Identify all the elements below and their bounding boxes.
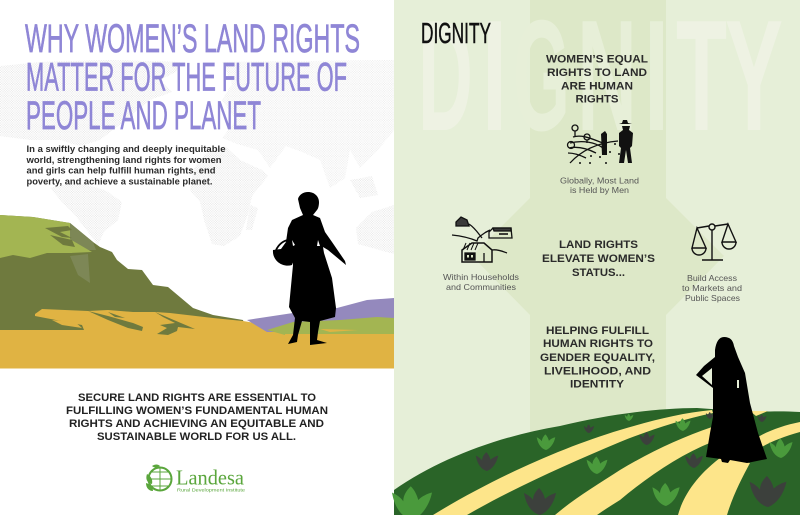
- panel: dignity: [392, 0, 800, 515]
- title: [25, 17, 360, 138]
- caption: most land held by men: Globally, Most Land: [560, 176, 639, 186]
- logo: Landesa: [146, 464, 245, 494]
- caption: build access: [682, 273, 742, 303]
- text: equal rights: WOMEN’S EQUAL: [546, 54, 648, 66]
- caption: households: Within Households: [443, 272, 519, 282]
- text: land rights elevate status: ELEVATE WOMEN’S: [542, 253, 655, 265]
- icon: houses: [452, 217, 512, 262]
- logo: Landesa: Landesa: [176, 466, 245, 490]
- silhouette: woman in long dress: [696, 337, 767, 463]
- world map background: [0, 60, 394, 254]
- text: helping fulfill human rights: IDENTITY: [570, 378, 625, 390]
- intro paragraph: In a swiftly changing and deeply inequitable: [26, 144, 226, 154]
- text: helping fulfill human rights: LIVELIHOOD, AND: [544, 366, 651, 378]
- closing statement: SECURE LAND RIGHTS ARE ESSENTIAL TO: [78, 392, 316, 404]
- caption: most land held by men: is Held by Men: [570, 185, 629, 195]
- closing statement: FULFILLING WOMEN’S FUNDAMENTAL HUMAN: [66, 405, 328, 417]
- plants: dark: [476, 412, 786, 515]
- heading: dignity: DIGNITY: [421, 18, 491, 50]
- panel: left: [0, 0, 394, 515]
- field with rows: [392, 408, 800, 515]
- caption: build access: to Markets and: [682, 283, 742, 293]
- title: MATTER FOR THE FUTURE OF: [26, 56, 347, 100]
- text: helping fulfill human rights: HELPING FULFILL: [546, 325, 649, 337]
- intro paragraph: [25, 144, 226, 186]
- caption: households: [443, 272, 519, 292]
- caption: build access: Public Spaces: [685, 293, 740, 303]
- closing statement: [66, 392, 328, 443]
- landscape illustration: [0, 215, 394, 368]
- central cross shape: [472, 0, 724, 515]
- text: equal rights: RIGHTS TO LAND: [547, 67, 647, 79]
- text: helping fulfill human rights: HUMAN RIGHTS TO: [543, 338, 653, 350]
- icon: scales: [692, 224, 736, 260]
- intro paragraph: poverty, and achieve a sustainable planet.: [26, 176, 212, 186]
- icon: farmland with man and woman: [568, 120, 633, 164]
- title: WHY WOMEN’S LAND RIGHTS: [25, 17, 360, 61]
- title: PEOPLE AND PLANET: [26, 94, 261, 138]
- closing statement: RIGHTS AND ACHIEVING AN EQUITABLE AND: [69, 418, 324, 430]
- caption: build access: Build Access: [687, 273, 737, 283]
- watermark word: [418, 0, 783, 164]
- text: equal rights: ARE HUMAN: [561, 80, 633, 92]
- text: helping fulfill human rights: [540, 325, 655, 390]
- text: land rights elevate status: [542, 239, 655, 279]
- caption: most land held by men: [560, 176, 639, 195]
- intro paragraph: world, strengthening land rights for women: [25, 155, 221, 165]
- text: equal rights: RIGHTS: [576, 94, 618, 106]
- text: helping fulfill human rights: GENDER EQUALITY,: [540, 352, 655, 364]
- plants: green: [392, 414, 793, 515]
- logo: Landesa: Rural Development Institute: [177, 488, 245, 494]
- intro paragraph: and girls can help fulfill human rights, end: [26, 166, 216, 176]
- caption: households: and Communities: [446, 282, 516, 292]
- text: land rights elevate status: LAND RIGHTS: [559, 239, 638, 251]
- silhouette: woman with basket: [273, 192, 346, 345]
- closing statement: SUSTAINABLE WORLD FOR US ALL.: [97, 431, 296, 443]
- text: equal rights: [546, 54, 648, 106]
- text: land rights elevate status: STATUS...: [572, 267, 625, 279]
